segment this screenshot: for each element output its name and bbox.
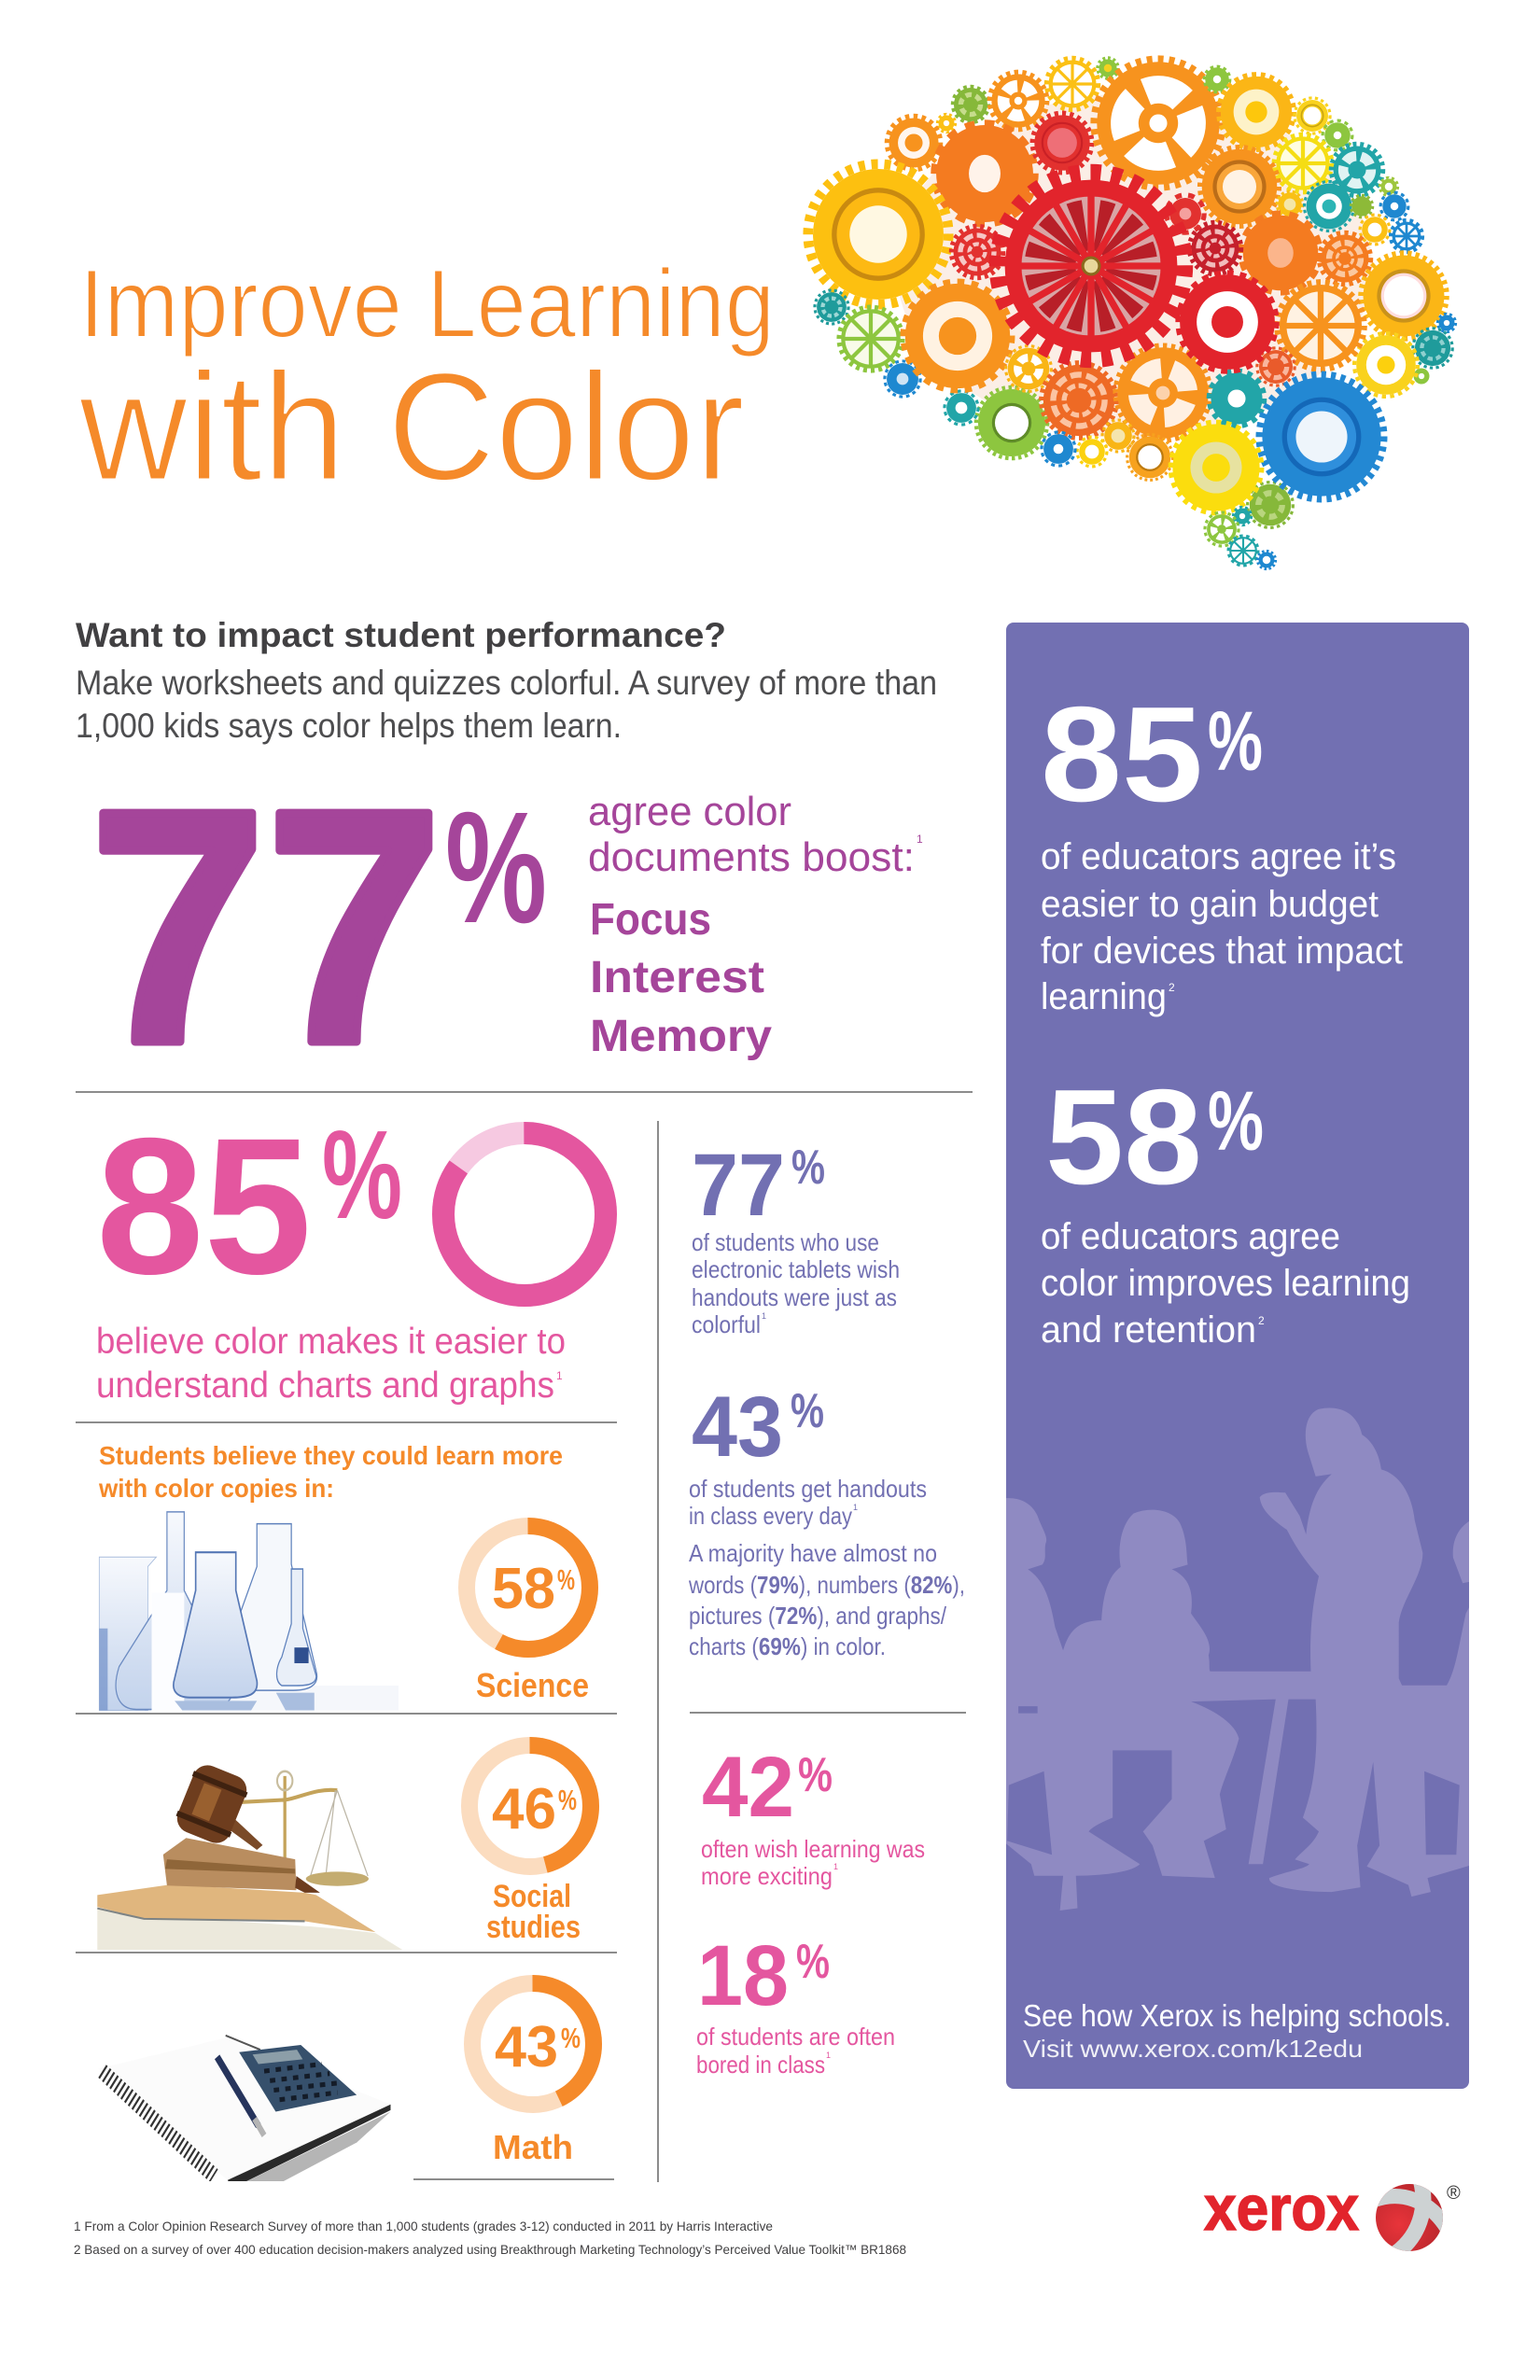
donut chart: 43% math [472, 1983, 594, 2105]
stat: 18% bored: % [796, 1935, 830, 1989]
stat: 58% educators: 2 [1258, 1314, 1265, 1327]
label: math: Math [493, 2128, 573, 2166]
big stat: 77%: % [445, 779, 547, 957]
stat: 18% bored: 18 [697, 1928, 789, 2023]
stat: 58% educators: % [1208, 1075, 1264, 1169]
stat: 85% educators [1041, 679, 1403, 1017]
stat: 85% educators: of educators agree it’s [1041, 836, 1396, 877]
stat: 58% educators [1041, 1061, 1410, 1351]
stat: 85% educators: 2 [1169, 981, 1175, 994]
donut chart: 58% science: 58 [492, 1557, 555, 1621]
stat: 43% handouts: charts (69%) in color. [689, 1632, 886, 1660]
photo: lab flasks [99, 1512, 399, 1711]
stat: 43% handouts: 43 [692, 1379, 783, 1475]
stat: 18% bored: bored in class [696, 2051, 825, 2079]
footnotes: 2 Based on a survey of over 400 education decision-makers analyzed using Breakthrough Marketing Technology’s Perceived Value Toolkit™ BR1868 [74, 2242, 906, 2257]
donut chart: 43% math: 43 [495, 2015, 558, 2079]
call to action [1023, 1998, 1451, 2063]
stat: 85% educators: 85 [1041, 679, 1203, 830]
85% caption: 1 [556, 1369, 563, 1382]
stat: 18% bored [696, 1928, 895, 2079]
logo: xerox [1203, 2184, 1460, 2251]
big stat: 77%: Interest [590, 953, 764, 1002]
call to action: Visit www.xerox.com/k12edu [1023, 2035, 1363, 2063]
big stat: 77% [90, 742, 923, 1113]
subject heading: Students believe they could learn more [99, 1441, 563, 1470]
big stat: 77%: 1 [917, 833, 923, 846]
intro text: 1,000 kids says color helps them learn. [76, 707, 622, 745]
stat: 77% tablets: 77 [692, 1136, 785, 1235]
label: science: Science [476, 1666, 589, 1704]
footnotes [74, 2219, 906, 2257]
photo: gavel, scales and books [97, 1760, 402, 1950]
donut chart: 43% math: % [561, 2022, 581, 2054]
call to action: See how Xerox is helping schools. [1023, 1998, 1451, 2033]
stat: 58% educators: of educators agree [1041, 1216, 1340, 1257]
subject heading: with color copies in: [98, 1474, 334, 1503]
intro text: Make worksheets and quizzes colorful. A survey of more than [76, 664, 937, 702]
stat: 77% tablets: 1 [762, 1311, 766, 1321]
stat: 42% exciting: 1 [833, 1862, 838, 1871]
stat: 43% handouts: words (79%), numbers (82%), [688, 1571, 965, 1599]
donut chart: 46% social studies: % [558, 1784, 577, 1816]
stat: 43% handouts: A majority have almost no [689, 1539, 937, 1567]
stat: 77% tablets: colorful [692, 1310, 761, 1338]
stat: 42% exciting: 42 [702, 1740, 794, 1835]
stat: 42% exciting: more exciting [701, 1862, 833, 1890]
illustration: classroom silhouette [1005, 1407, 1475, 1911]
stat: 43% handouts [688, 1379, 965, 1660]
stat: 42% exciting [701, 1740, 925, 1890]
donut chart: 46% social studies [469, 1745, 591, 1867]
stat: 58% educators: and retention [1041, 1309, 1256, 1351]
donut chart: 85% [443, 1133, 606, 1295]
donut chart: 46% social studies: 46 [492, 1777, 556, 1841]
stat: 43% handouts: pictures (72%), and graphs/ [689, 1602, 947, 1630]
label: social studies: studies [486, 1910, 581, 1945]
subject heading [98, 1441, 563, 1503]
stat: 85% educators: for devices that impact [1041, 931, 1403, 972]
stat: 77% tablets [692, 1136, 900, 1338]
stat: 58% educators: 58 [1045, 1061, 1202, 1212]
big stat: 85%: 85 [96, 1099, 312, 1315]
footnotes: 1 From a Color Opinion Research Survey of more than 1,000 students (grades 3-12) conducted in 2011 by Harris Interactive [74, 2219, 773, 2233]
donut chart: 58% science: % [557, 1563, 575, 1596]
big stat: 77%: Memory [590, 1012, 772, 1061]
big stat: 85%: % [322, 1104, 402, 1245]
panel: educators [1005, 623, 1475, 2089]
logo: xerox: xerox [1204, 2173, 1359, 2244]
stat: 43% handouts: in class every day [689, 1502, 852, 1530]
85% caption: understand charts and graphs [96, 1365, 554, 1406]
stat: 77% tablets: % [791, 1141, 825, 1195]
stat: 43% handouts: % [791, 1384, 824, 1438]
title: with Color [78, 341, 745, 512]
stat: 85% educators: % [1208, 695, 1263, 789]
logo: xerox: ® [1447, 2183, 1461, 2204]
stat: 85% educators: learning [1041, 976, 1167, 1017]
stat: 58% educators: color improves learning [1041, 1263, 1410, 1304]
icon: main red gear [998, 173, 1184, 359]
label: social studies: Social [493, 1879, 571, 1914]
stat: 18% bored: 1 [826, 2051, 831, 2060]
big stat: 77%: documents boost: [588, 834, 915, 880]
stat: 43% handouts: 1 [853, 1503, 858, 1512]
label: social studies [486, 1879, 581, 1945]
85% caption [96, 1322, 566, 1406]
title [78, 250, 775, 512]
photo: notebook, pen and calculator [98, 2035, 390, 2181]
stat: 18% bored: of students are often [696, 2023, 895, 2051]
title: Improve Learning [79, 250, 775, 358]
big stat: 77%: Focus [590, 895, 711, 945]
big stat: 77%: 77 [90, 742, 442, 1113]
stat: 85% educators: easier to gain budget [1041, 884, 1379, 925]
donut chart: 58% science [467, 1526, 590, 1649]
stat: 77% tablets: handouts were just as [692, 1283, 897, 1311]
stat: 42% exciting: often wish learning was [701, 1835, 925, 1863]
stat: 43% handouts: of students get handouts [689, 1475, 927, 1503]
big stat: 77%: agree color [588, 789, 791, 834]
intro heading: Want to impact student performance? [76, 616, 726, 654]
stat: 42% exciting: % [798, 1748, 833, 1802]
stat: 77% tablets: electronic tablets wish [692, 1255, 900, 1283]
illustration: brain made of colorful gears [808, 58, 1456, 569]
stat: 77% tablets: of students who use [692, 1228, 879, 1256]
85% caption: believe color makes it easier to [96, 1322, 566, 1362]
intro text [76, 664, 937, 745]
